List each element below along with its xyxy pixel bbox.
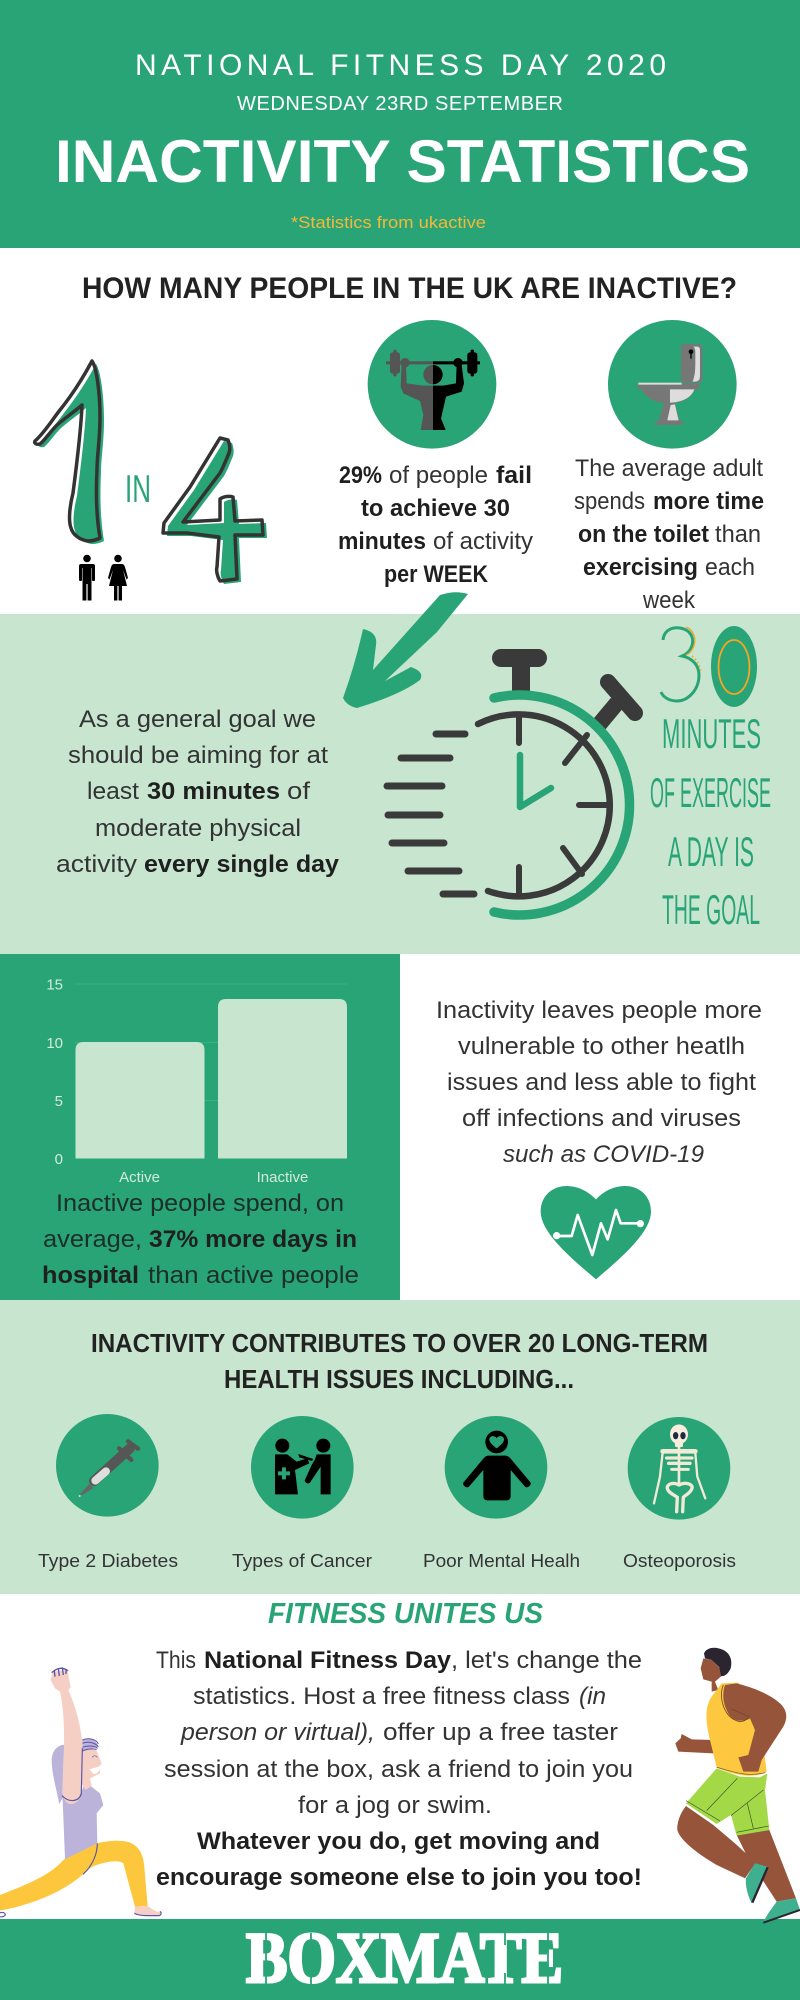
label: type 2 diabetes: Type 2 Diabetes bbox=[38, 1551, 178, 1571]
text: time on the toilet: each bbox=[705, 554, 755, 581]
front shoe bbox=[746, 1863, 767, 1903]
icon: heart with pulse bbox=[541, 1186, 651, 1279]
text: general goal: of bbox=[287, 778, 310, 805]
headband bbox=[82, 1739, 98, 1751]
panel: hospital days chart bbox=[0, 954, 400, 1300]
text: 29 percent fail: minutes bbox=[338, 528, 426, 555]
bar chart bbox=[46, 976, 347, 1186]
shorts bbox=[686, 1768, 769, 1836]
event title: NATIONAL FITNESS DAY 2020 bbox=[135, 49, 666, 82]
text: call to action: (in bbox=[579, 1683, 606, 1710]
bar chart: Inactive bbox=[257, 1169, 308, 1186]
text: 29 percent fail: of people bbox=[389, 462, 488, 489]
panel: how many people are inactive bbox=[35, 272, 764, 614]
icon: cancer treatment bbox=[251, 1416, 354, 1519]
raised arm bbox=[51, 1670, 82, 1804]
30 numeral bbox=[661, 626, 757, 707]
text: 29 percent fail: of activity bbox=[433, 528, 533, 555]
text: vulnerability: such as COVID-19 bbox=[503, 1141, 704, 1168]
text: call to action: for a jog or swim. bbox=[298, 1792, 492, 1819]
word IN: IN bbox=[125, 468, 151, 511]
text: call to action bbox=[156, 1647, 642, 1891]
text: general goal: moderate physical bbox=[95, 815, 301, 842]
text: 29 percent fail: 29% bbox=[339, 462, 382, 489]
text: time on the toilet: on the toilet bbox=[578, 521, 709, 548]
text: vulnerability: issues and less able to fight bbox=[447, 1069, 756, 1096]
logo: boxmate: BOXMATE bbox=[246, 1918, 563, 1998]
text: call to action: person or virtual), bbox=[180, 1719, 375, 1746]
text: time on the toilet: exercising bbox=[583, 554, 698, 581]
arrow bbox=[343, 592, 468, 708]
icon: weightlifter bbox=[368, 320, 496, 449]
text: 29 percent fail: to achieve 30 bbox=[361, 495, 510, 522]
text: hospital days: average, bbox=[43, 1226, 142, 1253]
icon: skeleton bbox=[628, 1417, 730, 1520]
text: call to action: encourage someone else to join you too! bbox=[156, 1864, 642, 1891]
text: 29 percent fail: per WEEK bbox=[384, 561, 489, 588]
section heading bbox=[91, 1328, 708, 1394]
text: time on the toilet bbox=[574, 455, 764, 614]
text: time on the toilet: The average adult bbox=[575, 455, 763, 482]
text: hospital days: 37% more days in bbox=[149, 1226, 357, 1253]
icon: man bbox=[79, 555, 95, 600]
text: general goal: activity bbox=[56, 851, 137, 878]
header panel bbox=[0, 0, 800, 248]
text: general goal: should be aiming for at bbox=[68, 742, 328, 769]
back leg bbox=[737, 1830, 796, 1902]
numeral 4 bbox=[163, 438, 267, 584]
text: hospital days: than active people bbox=[148, 1262, 359, 1289]
text: hospital days bbox=[42, 1190, 359, 1289]
text: time on the toilet: week bbox=[642, 587, 696, 614]
footer panel bbox=[0, 1918, 800, 2000]
vest bbox=[706, 1683, 767, 1776]
text: vulnerability bbox=[436, 997, 762, 1168]
panel: fitness unites us bbox=[0, 1598, 800, 1923]
icon: syringe bbox=[56, 1414, 159, 1517]
1 in 4 statistic bbox=[35, 361, 267, 600]
event date: WEDNESDAY 23RD SEPTEMBER bbox=[237, 93, 563, 115]
near arm bbox=[675, 1734, 713, 1753]
icon: stopwatch bbox=[387, 649, 635, 915]
bar chart: 5 bbox=[55, 1093, 63, 1110]
text: hospital days: hospital bbox=[42, 1262, 139, 1289]
text: vulnerability: vulnerable to other heatlh bbox=[458, 1033, 745, 1060]
text: hospital days: Inactive people spend, on bbox=[56, 1190, 344, 1217]
text: time on the toilet: spends bbox=[574, 488, 645, 515]
head bbox=[701, 1658, 722, 1692]
text: general goal: As a general goal we bbox=[79, 706, 316, 733]
bar: inactive bbox=[218, 999, 347, 1158]
label: types of cancer: Types of Cancer bbox=[232, 1551, 372, 1571]
section heading: INACTIVITY CONTRIBUTES TO OVER 20 LONG-TERM bbox=[91, 1328, 708, 1358]
bar chart: Active bbox=[119, 1169, 160, 1186]
text: time on the toilet: more time bbox=[653, 488, 764, 515]
text: vulnerability: off infections and viruses bbox=[462, 1105, 741, 1132]
icon: mental health person bbox=[445, 1416, 547, 1519]
illustration: man running bbox=[675, 1648, 800, 1923]
text: general goal: every single day bbox=[144, 851, 340, 878]
section heading: HEALTH ISSUES INCLUDING... bbox=[224, 1364, 574, 1394]
numeral 1 bbox=[35, 361, 104, 544]
label: poor mental health: Poor Mental Healh bbox=[423, 1551, 580, 1571]
text: vulnerability: Inactivity leaves people more bbox=[436, 997, 762, 1024]
back shoe bbox=[763, 1898, 800, 1922]
hair bbox=[52, 1744, 68, 1804]
panel: long-term health issues bbox=[0, 1300, 800, 1594]
foot bbox=[134, 1906, 161, 1916]
bar chart: 10 bbox=[46, 1035, 63, 1052]
main title: INACTIVITY STATISTICS bbox=[55, 128, 750, 195]
text: call to action: This bbox=[156, 1647, 196, 1674]
label: osteoporosis: Osteoporosis bbox=[623, 1551, 736, 1571]
section heading: FITNESS UNITES US bbox=[268, 1598, 544, 1630]
bar chart: 15 bbox=[46, 976, 63, 994]
illustration: woman lunging bbox=[0, 1667, 161, 1917]
far arm bbox=[723, 1683, 786, 1772]
text: 29 percent fail bbox=[338, 462, 533, 588]
text: minutes of exercise a day is the goal bbox=[650, 710, 771, 933]
text: call to action: National Fitness Day bbox=[204, 1647, 452, 1674]
text: general goal: 30 minutes bbox=[147, 778, 280, 805]
source note: *Statistics from ukactive bbox=[291, 213, 486, 232]
front leg bbox=[677, 1806, 756, 1878]
bar: active bbox=[76, 1042, 204, 1158]
icon: woman bbox=[108, 555, 128, 600]
text: call to action: Whatever you do, get moving and bbox=[197, 1828, 600, 1855]
text: 29 percent fail: fail bbox=[496, 462, 532, 489]
face bbox=[82, 1747, 102, 1790]
icon: toilet bbox=[608, 320, 737, 449]
text: call to action: session at the box, ask a friend to join you bbox=[164, 1756, 633, 1783]
panel: 30 minutes goal bbox=[0, 592, 800, 954]
text: call to action: offer up a free taster bbox=[383, 1719, 618, 1746]
text: general goal: least bbox=[87, 778, 139, 805]
torso bbox=[62, 1782, 103, 1861]
section heading: HOW MANY PEOPLE IN THE UK ARE INACTIVE? bbox=[82, 272, 737, 305]
text: time on the toilet: than bbox=[715, 521, 761, 548]
leggings bbox=[0, 1841, 148, 1911]
text: call to action: , let's change the bbox=[451, 1647, 642, 1674]
panel: vulnerability to health issues bbox=[436, 997, 762, 1279]
bar chart: 0 bbox=[55, 1151, 63, 1168]
text: general goal bbox=[56, 706, 340, 878]
text: call to action: statistics. Host a free fitness class bbox=[193, 1683, 570, 1710]
